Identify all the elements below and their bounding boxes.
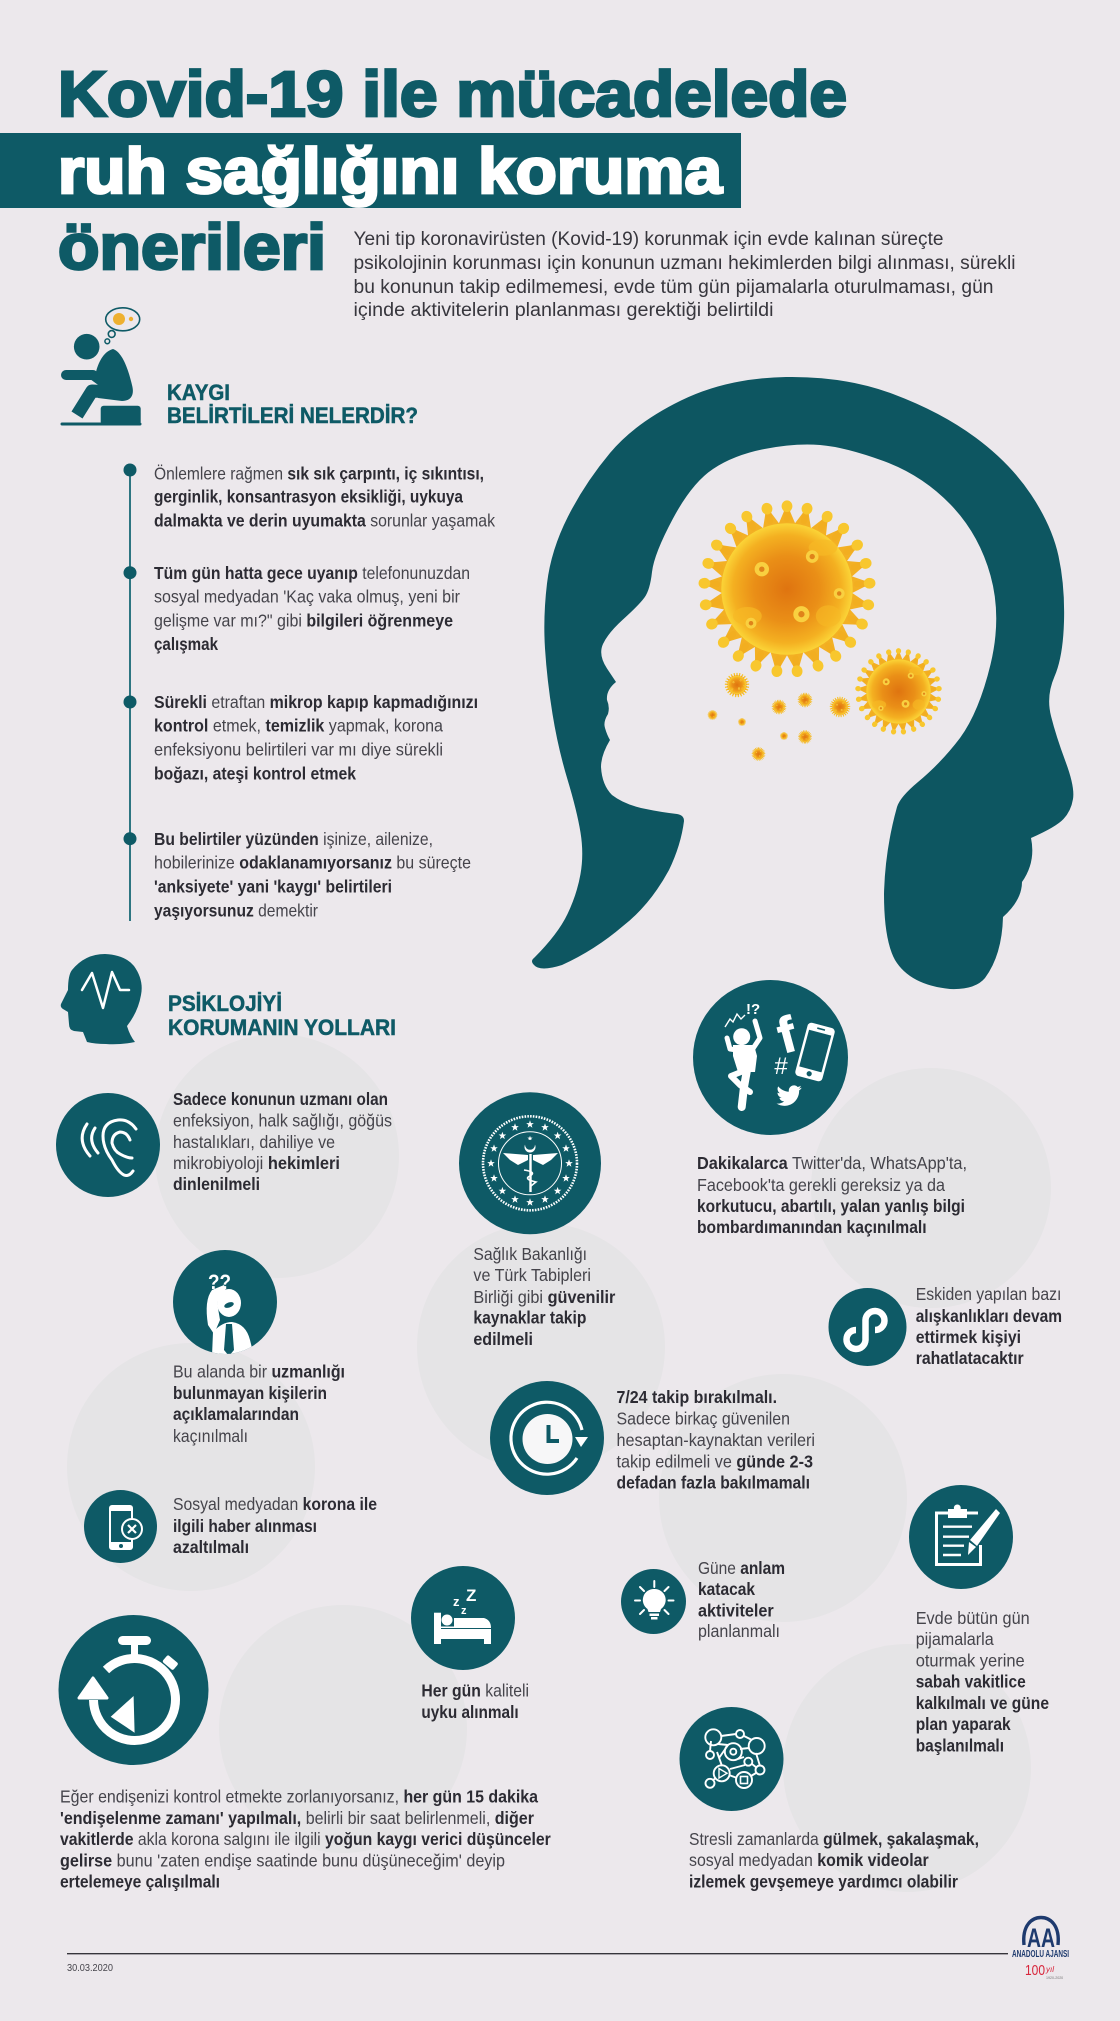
intro text: psikolojinin korunması için konunun uzmanı hekimlerden bilgi alınması, sürekli	[354, 253, 1016, 274]
tip text: sosyal medya haber: Sosyal medyadan korona ile	[173, 1494, 377, 1514]
tip text: aktiviteler: planlanmalı	[698, 1621, 780, 1641]
tip text: bilgi bombardımanı: bombardımanından kaçınılmalı	[697, 1217, 927, 1237]
symptom 1 text: dalmakta ve derin uyumakta sorunlar yaşamak	[154, 511, 495, 531]
icon: head with pulse	[61, 954, 142, 1044]
tip text: sabah planı: kalkılmalı ve güne	[916, 1693, 1049, 1713]
tip text: uzman: mikrobiyoloji hekimleri	[173, 1153, 340, 1173]
tip text: 7/24 takip: Sadece birkaç güvenilen	[616, 1409, 790, 1429]
tip text: aktiviteler: Güne anlam	[698, 1558, 785, 1578]
symptom 3 text: enfeksiyonu belirtileri var mı diye sürekli	[154, 739, 443, 759]
tip text: gülmek: izlemek gevşemeye yardımcı olabilir	[689, 1872, 958, 1892]
tip text: 7/24 takip: hesaptan-kaynaktan verileri	[616, 1430, 815, 1450]
tip: sleep icon: Z	[466, 1586, 476, 1605]
tip text: güvenilir kaynaklar: ve Türk Tabipleri	[473, 1265, 591, 1285]
tip text: sabah planı: oturmak yerine	[916, 1651, 1025, 1671]
logo: Anadolu Ajansı: 100	[1025, 1962, 1045, 1979]
tip text: endişelenme zamanı: ertelemeye çalışılmalı	[60, 1872, 220, 1892]
heading: kaygı belirtileri: BELİRTİLERİ NELERDİR?	[167, 403, 418, 428]
tip text: sabah planı: plan yaparak	[916, 1714, 1011, 1734]
symptom 3 text	[154, 692, 478, 783]
tip: sleep icon: z	[461, 1605, 467, 1617]
heading: psikolojiyi korumanın yolları	[168, 991, 396, 1040]
intro text: Yeni tip koronavirüsten (Kovid-19) korunmak için evde kalınan süreçte	[354, 229, 944, 250]
symptom 2 text: Tüm gün hatta gece uyanıp telefonunuzdan	[154, 563, 470, 583]
tip text: uzman	[173, 1089, 392, 1194]
heading: kaygı belirtileri	[167, 380, 418, 428]
head silhouette	[532, 377, 1073, 989]
tip text: aktiviteler: aktiviteler	[698, 1601, 774, 1621]
tip text: gülmek: Stresli zamanlarda gülmek, şakalaşmak,	[689, 1829, 979, 1849]
symptom 3 text: boğazı, ateşi kontrol etmek	[154, 763, 356, 783]
logo: Anadolu Ajansı: ANADOLU AJANSI	[1012, 1949, 1069, 1960]
date: 30.03.2020	[67, 1962, 113, 1974]
tip: sleep icon	[411, 1566, 515, 1670]
tip text: 7/24 takip: takip edilmeli ve günde 2-3	[616, 1452, 813, 1472]
tip text: uyku: uyku alınmalı	[421, 1702, 519, 1722]
symptom 2 text	[154, 563, 470, 654]
tip text: güvenilir kaynaklar: Sağlık Bakanlığı	[473, 1244, 587, 1264]
tip: health ministry emblem	[459, 1092, 601, 1234]
tip text: bilgi bombardımanı: Dakikalarca Twitter'da, WhatsApp'ta,	[697, 1153, 967, 1173]
tip: confused man icon	[173, 1250, 277, 1356]
tip text: alışkanlıklar: ettirmek kişiyi	[916, 1327, 1021, 1347]
tip text: uzman: enfeksiyon, halk sağlığı, göğüs	[173, 1110, 392, 1130]
tip text: uzmanlığı olmayanlar: bulunmayan kişilerin	[173, 1383, 327, 1403]
tip text: sabah planı: Evde bütün gün	[916, 1608, 1030, 1628]
tip text: uzmanlığı olmayanlar	[173, 1362, 345, 1446]
title	[0, 58, 847, 283]
symptom 4 text: Bu belirtiler yüzünden işinize, ailenize,	[154, 829, 433, 849]
tip text: sabah planı: başlanılmalı	[916, 1736, 1004, 1756]
tip text: endişelenme zamanı: 'endişelenme zamanı' yapılmalı, belirli bir saat belirlenmeli, diğer	[60, 1808, 534, 1828]
symptom 4 text	[154, 829, 471, 921]
tip text: sabah planı	[916, 1608, 1049, 1756]
symptom 3 text: kontrol etmek, temizlik yapmak, korona	[154, 716, 443, 736]
tip text: uyku	[421, 1681, 529, 1722]
tip text: güvenilir kaynaklar: kaynaklar takip	[473, 1308, 586, 1328]
symptom 2 text: gelişme var mı?" gibi bilgileri öğrenmeye	[154, 611, 453, 631]
tip text: bilgi bombardımanı: korkutucu, abartılı, yalan yanlış bilgi	[697, 1196, 965, 1216]
intro text: içinde aktivitelerin planlanması gerektiği belirtildi	[354, 300, 774, 321]
tip text: güvenilir kaynaklar: Birliği gibi güvenilir	[473, 1287, 616, 1307]
symptom 4 text: hobilerinize odaklanamıyorsanız bu süreçte	[154, 853, 471, 873]
tip: ear icon	[56, 1093, 160, 1197]
tip: social media bombardment icon: #	[774, 1053, 788, 1080]
logo: Anadolu Ajansı: 1920-2020	[1046, 1976, 1063, 1980]
heading: kaygı belirtileri: KAYGI	[167, 380, 230, 405]
tip: clipboard and pen icon	[909, 1485, 1013, 1589]
symptom 1 text: gerginlik, konsantrasyon eksikliği, uykuya	[154, 487, 463, 507]
tip text: bilgi bombardımanı	[697, 1153, 967, 1237]
title: ruh sağlığını koruma	[58, 135, 722, 207]
tip text: güvenilir kaynaklar: edilmeli	[473, 1329, 533, 1349]
tip text: uzman: Sadece konunun uzmanı olan	[173, 1089, 388, 1109]
tip text: alışkanlıklar: alışkanlıkları devam	[916, 1306, 1062, 1326]
tip: social media bombardment icon	[693, 980, 848, 1135]
title: önerileri	[58, 211, 326, 283]
tip text: gülmek	[689, 1829, 979, 1892]
tip: stopwatch icon	[58, 1615, 208, 1765]
intro text: bu konunun takip edilmemesi, evde tüm gün pijamalarla oturulmaması, gün	[354, 277, 994, 298]
tip text: bilgi bombardımanı: Facebook'ta gerekli gereksiz ya da	[697, 1175, 945, 1195]
logo: Anadolu Ajansı: yıl	[1045, 1965, 1054, 1974]
tip: social media bombardment icon: !?	[746, 1001, 760, 1018]
intro text	[354, 229, 1016, 321]
tip text: uyku: Her gün kaliteli	[421, 1681, 529, 1701]
tip text: alışkanlıklar: rahatlatacaktır	[916, 1348, 1024, 1368]
symptom 2 text: sosyal medyadan 'Kaç vaka olmuş, yeni bir	[154, 587, 460, 607]
tip text: 7/24 takip: defadan fazla bakılmamalı	[616, 1473, 810, 1493]
tip: sleep icon: z	[453, 1594, 460, 1609]
footer line	[67, 1953, 1008, 1955]
logo: Anadolu Ajansı: AA	[1027, 1923, 1055, 1953]
tip text: güvenilir kaynaklar	[473, 1244, 616, 1349]
tip text: sabah planı: pijamalarla	[916, 1629, 994, 1649]
tip: clock icon	[490, 1381, 604, 1495]
tip text: uzmanlığı olmayanlar: açıklamalarından	[173, 1404, 299, 1424]
logo: Anadolu Ajansı	[1012, 1918, 1069, 1980]
tip text: sosyal medya haber: azaltılmalı	[173, 1537, 249, 1557]
tip text: endişelenme zamanı: gelirse bunu 'zaten endişe saatinde bunu düşüneceğim' deyip	[60, 1851, 505, 1871]
title: Kovid-19 ile mücadelede	[58, 58, 847, 130]
heading: psikolojiyi korumanın yolları: KORUMANIN YOLLARI	[168, 1015, 396, 1040]
tip text: uzmanlığı olmayanlar: Bu alanda bir uzmanlığı	[173, 1362, 345, 1382]
tip text: sosyal medya haber	[173, 1494, 377, 1557]
tip: light bulb icon	[621, 1569, 686, 1634]
symptom 1 text	[154, 463, 495, 531]
tip text: aktiviteler: katacak	[698, 1579, 755, 1599]
tip text: sabah planı: sabah vakitlice	[916, 1672, 1026, 1692]
symptom 3 text: Sürekli etraftan mikrop kapıp kapmadığınızı	[154, 692, 478, 712]
tip text: endişelenme zamanı: vakitlerde akla korona salgını ile ilgili yoğun kaygı verici düşünceler	[60, 1829, 551, 1849]
tip text: alışkanlıklar: Eskiden yapılan bazı	[916, 1284, 1061, 1304]
tip: network icon	[680, 1707, 784, 1811]
tip text: 7/24 takip	[616, 1387, 815, 1493]
icon: seated worried person with thought bubble	[62, 308, 141, 425]
timeline line and dots	[124, 464, 136, 921]
symptom 4 text: 'anksiyete' yani 'kaygı' belirtileri	[154, 877, 392, 897]
symptom 1 text: Önlemlere rağmen sık sık çarpıntı, iç sıkıntısı,	[154, 463, 484, 483]
tip: confused man icon: ??	[208, 1271, 231, 1294]
tip text: uzman: hastalıkları, dahiliye ve	[173, 1132, 335, 1152]
symptom 2 text: çalışmak	[154, 634, 218, 654]
virus illustrations	[698, 500, 942, 761]
tip text: uzmanlığı olmayanlar: kaçınılmalı	[173, 1426, 248, 1446]
tip: phone with x icon	[84, 1490, 157, 1563]
tip text: uzman: dinlenilmeli	[173, 1174, 260, 1194]
heading: psikolojiyi korumanın yolları: PSİKLOJİYİ	[168, 991, 282, 1016]
tip text: alışkanlıklar	[916, 1284, 1062, 1368]
tip text: endişelenme zamanı: Eğer endişenizi kontrol etmekte zorlanıyorsanız, her gün 15 dakika	[60, 1787, 538, 1807]
tip text: gülmek: sosyal medyadan komik videolar	[689, 1850, 929, 1870]
tip text: 7/24 takip: 7/24 takip bırakılmalı.	[616, 1387, 777, 1407]
tip: social media bombardment icon: f	[771, 1006, 802, 1064]
tip text: endişelenme zamanı	[60, 1787, 551, 1892]
tip text: sosyal medya haber: ilgili haber alınması	[173, 1516, 317, 1536]
tip: chain loop icon	[828, 1288, 906, 1366]
background circles	[67, 1034, 1051, 1892]
symptom 4 text: yaşıyorsunuz demektir	[154, 901, 318, 921]
tip text: aktiviteler	[698, 1558, 785, 1641]
